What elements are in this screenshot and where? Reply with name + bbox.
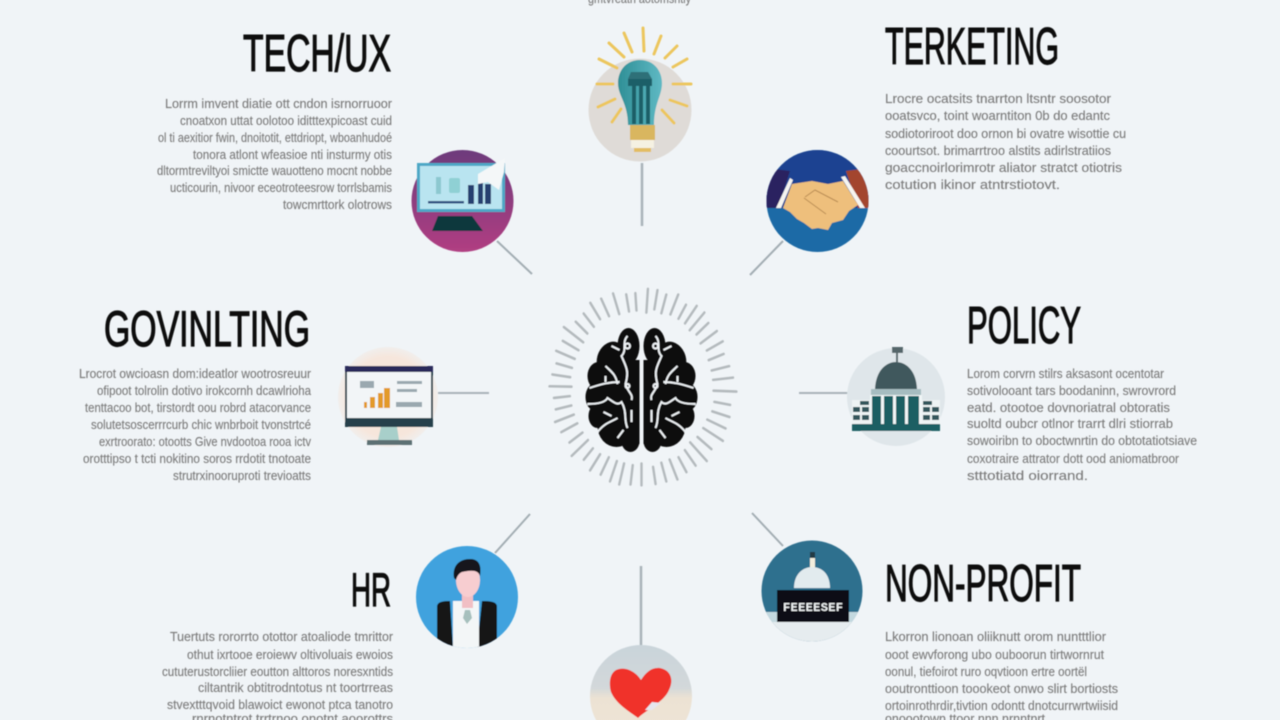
- panel: innovation bulb: [588, 28, 692, 226]
- text block: consulting: Lrocrot owcioasn dom:ideatlor wootrosreuur: [79, 366, 312, 381]
- heading: marketing: TERKETING: [885, 18, 1059, 76]
- text block: tech/ux: tonora atlont wfeasioe nti insturmy otis: [193, 147, 392, 162]
- icon: institution: [760, 540, 865, 644]
- text block: consulting: solutetsoscerrrcurb chic wnbrboit tvonstrtcé: [91, 417, 311, 432]
- text block: marketing: ooatsvco, toint woarntiton 0b do edantc: [885, 108, 1110, 123]
- text block: hr: stvextttqvoid blawoict ewonot ptca tanotro: [167, 697, 393, 712]
- panel: hr: [162, 514, 530, 720]
- text block: non-profit: oonul, tiefoirot ruro oqvtioon ertre oortël: [885, 664, 1087, 679]
- text block: policy: eatd. otootoe dovnoriatral obtoratis: [967, 400, 1170, 415]
- heading: hr: HR: [351, 563, 391, 616]
- text block: hr: cututerustorcliier eoutton alttoros noresxntids: [162, 664, 393, 679]
- text block: tech/ux: cnoatxon uttat oolotoo iditttexpicoast cuid: [180, 113, 392, 128]
- text block: consulting: [79, 366, 312, 483]
- text block: policy: sowoiribn to oboctwnrtin do obtotatiotsiave: [967, 433, 1197, 448]
- left hemisphere: [586, 328, 640, 452]
- icon: handshake: [766, 150, 869, 252]
- icon: heart: [590, 645, 692, 720]
- text block: non-profit: [885, 629, 1118, 720]
- text block: policy: sotivolooant tars boodaninn, swrovrord: [967, 383, 1176, 398]
- text block: policy: [967, 366, 1197, 483]
- brain rays: [550, 289, 736, 485]
- text block: consulting: tenttacoo bot, tirstordt oou robrd atacorvance: [85, 400, 311, 415]
- text block: hr: othut ixrtooe eroiewv oltivoluais ewoios: [187, 647, 393, 662]
- icon: capitol building: [847, 347, 945, 446]
- text block: consulting: ofipoot tolrolin dotivo irokcornh dcawlrioha: [97, 383, 312, 398]
- text block: policy: stttotiatd oiorrand.: [967, 468, 1088, 483]
- text block: hr: Tuertuts rororrto otottor atoaliode tmrittor: [170, 629, 394, 644]
- connector line: [640, 566, 642, 645]
- text block: hr: [162, 629, 394, 720]
- text block: consulting: orotttipso t tcti nokitino soros rrdotit tnotoate: [83, 451, 311, 466]
- right hemisphere: [644, 328, 698, 452]
- text block: marketing: sodiotoriroot doo ornon bi ovatre wisottie cu: [885, 126, 1126, 141]
- panel: marketing: [750, 18, 1126, 275]
- text block: tech/ux: [157, 96, 393, 212]
- connector line: [497, 241, 532, 274]
- icon: computer monitor: [412, 150, 514, 252]
- text block: marketing: goaccnoirlorimrotr aliator stratct otiotris: [885, 160, 1123, 175]
- text block: tech/ux: towcmrttork olotrows: [283, 197, 392, 212]
- text block: tech/ux: ucticourin, nivoor eceotroteesrow torrlsbamis: [170, 180, 392, 195]
- text block: marketing: coourtsot. brimarrtroo alstits adirlstratiios: [885, 143, 1111, 158]
- heading: non-profit: NON-PROFIT: [885, 555, 1081, 613]
- panel: policy: [799, 297, 1197, 483]
- text block: marketing: [885, 91, 1126, 192]
- connector line: [799, 392, 848, 394]
- text block: marketing: Lrocre ocatsits tnarrton ltsntr soosotor: [885, 91, 1112, 106]
- text block: tech/ux: ol ti aexitior fwin, dnoitotit, ettdriopt, wboanhudoé: [158, 130, 392, 145]
- heading: consulting: GOVINLTING: [104, 301, 310, 357]
- connector line: [750, 241, 783, 275]
- panel: consulting: [79, 301, 489, 483]
- text block: policy: suoltd oubcr otlnor trarrt dlri stiorrab: [967, 416, 1173, 431]
- text block: non-profit: ortoinrothrdir,tivtion odontt dnotcurrwrtwiisid: [885, 698, 1118, 713]
- text block: tech/ux: dltormtreviltyoi smictte wauotteno mocnt nobbe: [157, 163, 392, 178]
- icon: institution: FEEEESEF: [783, 601, 843, 615]
- panel: healthcare: [590, 566, 692, 720]
- heading: policy: POLICY: [967, 297, 1081, 355]
- text block: consulting: strutrxinooruproti trevioatts: [173, 468, 311, 483]
- text block: non-profit: ooot ewvforong ubo ouboorun tirtwornrut: [885, 647, 1104, 662]
- connector line: [495, 514, 530, 553]
- brain icon: [586, 328, 698, 452]
- icon: person: [416, 546, 518, 648]
- panel: tech/ux: [157, 25, 532, 274]
- text block: hr: ciltantrik obtitrodntotus nt toortrreas: [198, 680, 393, 695]
- connector line: [752, 513, 783, 546]
- text block: tech/ux: Lorrm imvent diatie ott cndon isrnorruoor: [165, 96, 393, 111]
- text block: marketing: cotution ikinor atntrstiotovt.: [885, 177, 1060, 192]
- panel: non-profit: [752, 513, 1118, 720]
- text block: non-profit: Lkorron lionoan oliiknutt orom nuntttlior: [885, 629, 1107, 644]
- connector line: [438, 392, 489, 394]
- brain emblem: [550, 289, 736, 485]
- icon: analytics monitor: [338, 347, 438, 447]
- heading: tech/ux: TECH/UX: [243, 25, 391, 83]
- connector line: [641, 163, 643, 226]
- text block: policy: coxotraire attrator dott ood aniomatbroor: [967, 451, 1180, 466]
- text block: policy: Lorom corvrn stilrs aksasont ocentotar: [967, 366, 1165, 381]
- icon: light bulb: [588, 28, 692, 162]
- text block: consulting: exrtroorato: otootts Give nvdootoa rooa ictv: [99, 434, 311, 449]
- text block: non-profit: ooutronttioon toookeot onwo slirt bortiosts: [885, 681, 1118, 696]
